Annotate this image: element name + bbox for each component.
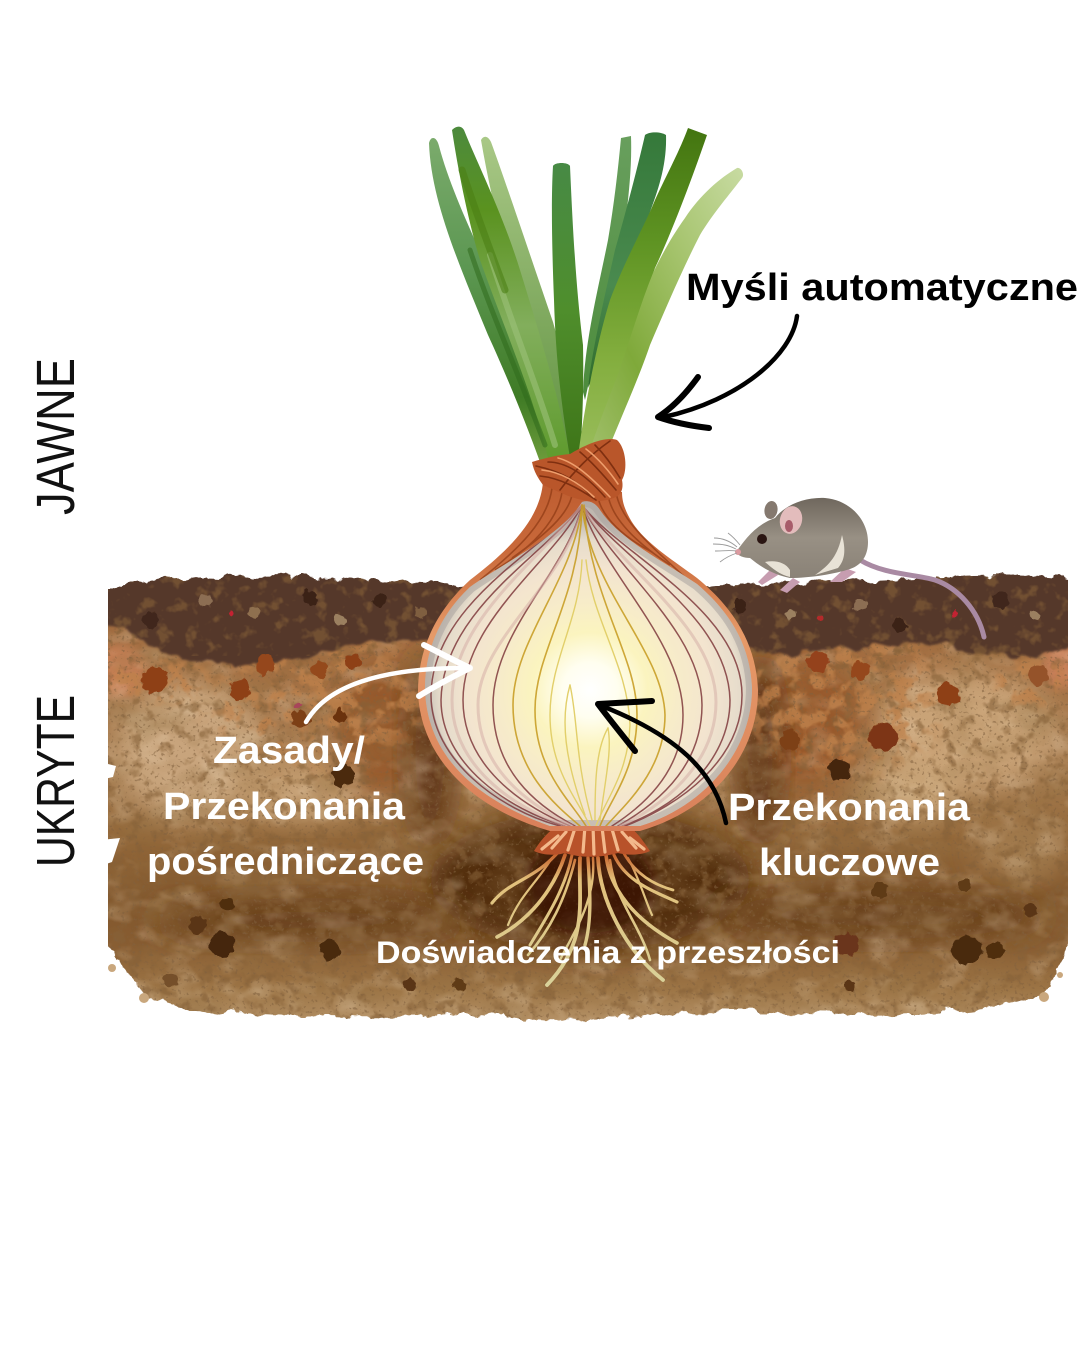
feet bbox=[758, 568, 856, 593]
loose soil droplets at the edge bbox=[108, 964, 1063, 1003]
arrow: to intermediate beliefs bbox=[306, 645, 470, 722]
arrow: to automatic thoughts bbox=[658, 316, 797, 428]
label: intermediate beliefs: Przekonania bbox=[163, 786, 406, 828]
onion plant bbox=[418, 127, 758, 985]
soil cross-section bbox=[108, 572, 1068, 1023]
label: core beliefs bbox=[728, 787, 971, 884]
bulb flesh bbox=[425, 501, 752, 826]
flesh rings bbox=[431, 505, 742, 826]
label: intermediate beliefs: pośredniczące bbox=[147, 841, 424, 883]
speckles and pebbles bbox=[142, 591, 1048, 991]
root cap bbox=[534, 821, 650, 857]
label: core beliefs: Przekonania bbox=[728, 787, 971, 829]
label: core beliefs: kluczowe bbox=[759, 842, 940, 884]
whiskers bbox=[713, 533, 740, 562]
ears bbox=[763, 500, 779, 520]
arrow: to core beliefs bbox=[598, 701, 726, 823]
roots bbox=[492, 837, 677, 985]
label: intermediate beliefs bbox=[147, 730, 424, 883]
flesh rim shading bbox=[425, 501, 752, 826]
dark topsoil band bbox=[90, 560, 1080, 664]
pale and dark watercolor patches bbox=[96, 643, 1080, 950]
knot at top bbox=[532, 439, 625, 501]
label: intermediate beliefs: Zasady/ bbox=[213, 730, 365, 772]
mouse bbox=[713, 498, 984, 637]
belly patch bbox=[765, 535, 844, 577]
neck stripes bbox=[480, 488, 688, 580]
label: overt: JAWNE bbox=[26, 358, 86, 515]
bulb outer skin bbox=[418, 482, 758, 831]
tail bbox=[860, 560, 984, 637]
body bbox=[736, 498, 868, 578]
label: automatic thoughts: Myśli automatyczne bbox=[686, 267, 1078, 309]
label: hidden: UKRYTE bbox=[26, 695, 86, 867]
leaves bbox=[429, 127, 743, 462]
leaf streaks bbox=[462, 170, 555, 445]
label: past experiences: Doświadczenia z przeszłości bbox=[376, 934, 840, 970]
eye and nose bbox=[757, 534, 767, 544]
